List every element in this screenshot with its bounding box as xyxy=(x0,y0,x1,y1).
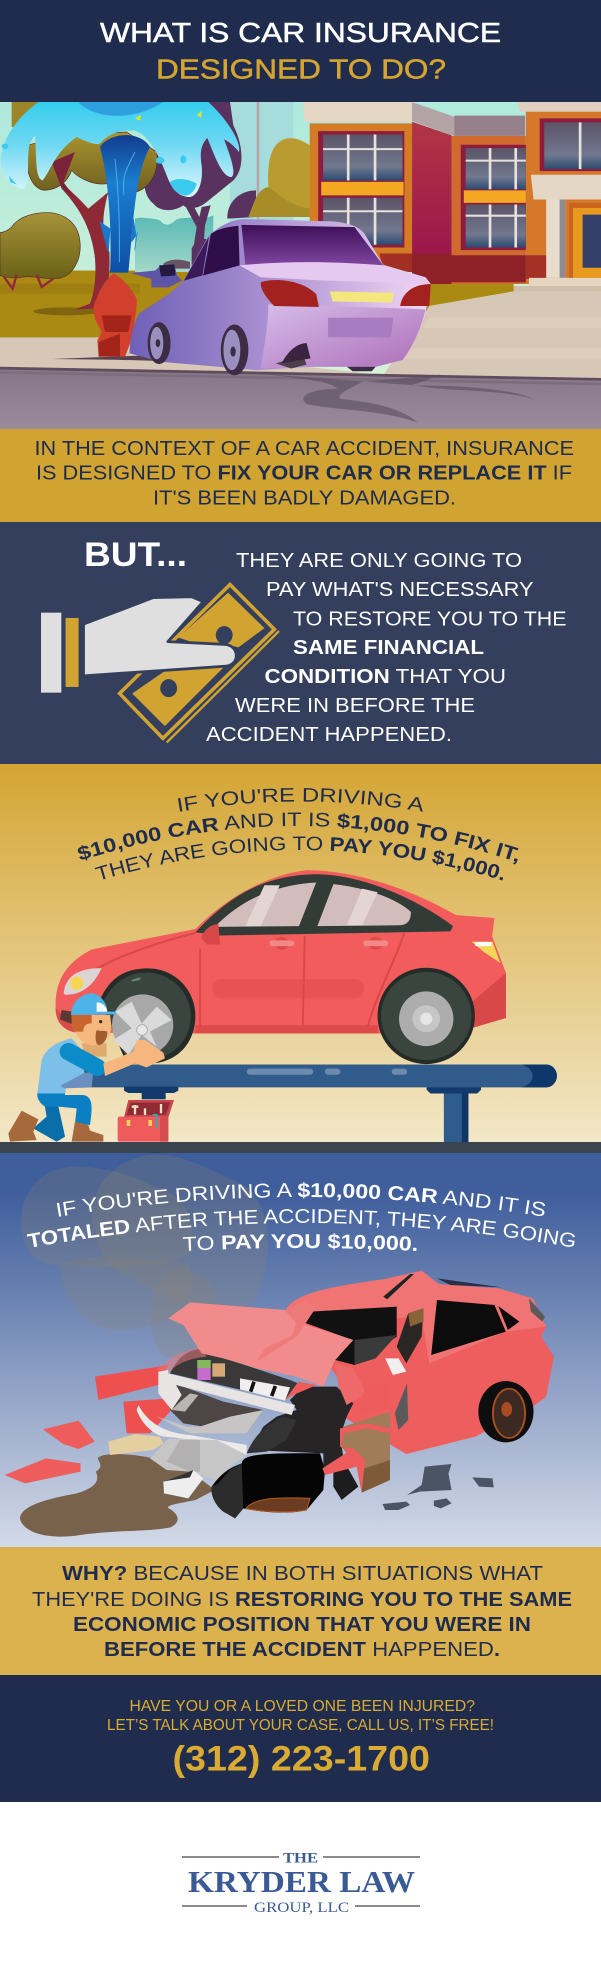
shadow under tree xyxy=(33,307,100,315)
red inner panels xyxy=(335,1363,367,1405)
floor strip xyxy=(0,1142,601,1153)
license plate xyxy=(328,318,393,337)
tree branch in front xyxy=(52,152,75,197)
panel: but explanation xyxy=(0,522,601,764)
logo: the kryder law group: GROUP, LLC xyxy=(254,1900,349,1916)
panel: title header xyxy=(0,0,601,102)
tail lights xyxy=(261,280,319,307)
white box xyxy=(163,1470,203,1498)
windows xyxy=(318,131,404,247)
logo: the kryder law group: KRYDER LAW xyxy=(188,1864,415,1899)
text: only going to pay what is necessary: SAME FINANCIAL xyxy=(293,637,484,659)
illustration: red car on lift with mechanic xyxy=(8,870,557,1142)
sidewalk xyxy=(0,291,601,379)
panel: context statement xyxy=(0,429,601,522)
skid marks xyxy=(261,374,533,423)
water splash xyxy=(1,102,239,197)
text: only going to pay what is necessary: ACCIDENT HAPPENED. xyxy=(206,724,452,746)
right olive bush xyxy=(268,138,310,209)
smoke cloud xyxy=(21,1155,268,1358)
text: repair scenario arched xyxy=(78,788,518,880)
olive canopy top xyxy=(12,102,38,127)
red car body xyxy=(56,870,506,1033)
text: only going to pay what is necessary: PAY WHAT'S NECESSARY xyxy=(266,579,534,601)
text: only going to pay what is necessary: TO RESTORE YOU TO THE xyxy=(293,608,566,630)
plum tree xyxy=(145,102,241,210)
left bush xyxy=(0,213,80,279)
teal hedge xyxy=(20,216,214,240)
windows xyxy=(431,1300,506,1355)
text: context line one: IN THE CONTEXT OF A CAR ACCIDENT, INSURANCE xyxy=(34,438,574,460)
brown panel xyxy=(342,1412,390,1493)
panel: call to action xyxy=(0,1675,601,1802)
text: only going to pay what is necessary: CONDITION THAT YOU xyxy=(264,666,506,688)
illustration: wrecked red car xyxy=(5,1155,554,1537)
windows xyxy=(195,874,453,936)
debris red xyxy=(43,1421,95,1449)
text: why line three: ECONOMIC POSITION THAT YOU WERE IN xyxy=(73,1614,531,1636)
car body xyxy=(130,219,431,370)
wheels xyxy=(282,343,310,363)
text: why line one: WHY? BECAUSE IN BOTH SITUATIONS WHAT xyxy=(62,1563,543,1585)
beige rock xyxy=(108,1434,163,1455)
text: have you been injured: HAVE YOU OR A LOVED ONE BEEN INJURED? xyxy=(130,1698,475,1715)
exhaust xyxy=(276,359,307,368)
text: totaled scenario arched: IF YOU'RE DRIVING A $10,000 CAR AND IT IS xyxy=(56,1182,546,1217)
icon: hand holding money xyxy=(41,584,279,742)
heading: what is car insurance: WHAT IS CAR INSURANCE xyxy=(100,17,501,48)
trees, water and hydrant xyxy=(0,102,310,315)
lift supports xyxy=(124,1087,178,1093)
lights xyxy=(64,968,102,995)
porch and door xyxy=(531,175,601,199)
dark shaft xyxy=(247,1417,297,1453)
lift bar xyxy=(65,1064,557,1087)
car cabin and rear xyxy=(286,1271,554,1454)
text: repair scenario arched: THEY ARE GOING TO PAY YOU $1,000. xyxy=(94,836,504,880)
logo: the kryder law group: THE xyxy=(283,1850,318,1866)
front wheel xyxy=(100,968,195,1064)
dark debris xyxy=(407,1464,452,1495)
wing mirror xyxy=(130,264,182,287)
engine dark xyxy=(250,1387,353,1470)
radiator teeth xyxy=(240,1378,290,1401)
olive canopy xyxy=(26,132,157,192)
heading: designed to do: DESIGNED TO DO? xyxy=(156,54,446,84)
mechanic xyxy=(8,993,165,1142)
text: call us free: LET’S TALK ABOUT YOUR CASE, CALL US, IT’S FREE! xyxy=(107,1717,494,1734)
text: only going to pay what is necessary: THEY ARE ONLY GOING TO xyxy=(236,550,522,572)
rear wheel xyxy=(378,968,475,1064)
text: totaled scenario arched xyxy=(26,1182,575,1252)
silver struts xyxy=(172,1393,198,1412)
lift legs xyxy=(444,1091,468,1142)
text: repair scenario arched: $10,000 CAR AND IT IS $1,000 TO FIX IT, xyxy=(78,812,518,864)
text: totaled scenario arched: TOTALED AFTER THE ACCIDENT, THEY ARE GOING xyxy=(26,1209,575,1248)
mirror xyxy=(201,924,220,944)
text: phone number: (312) 223-1700 xyxy=(172,1740,430,1778)
panel: totaled car scenario xyxy=(0,1153,601,1547)
tree trunk xyxy=(60,183,110,310)
logo: the kryder law group xyxy=(182,1850,420,1916)
toolbox xyxy=(118,1100,174,1142)
heading: but: BUT... xyxy=(84,536,187,574)
illustration: purple car crashed into fire hydrant xyxy=(0,102,601,430)
tyre xyxy=(211,1453,325,1518)
red bumper strips xyxy=(95,1365,168,1400)
road xyxy=(0,368,601,430)
door gap xyxy=(397,1308,424,1363)
text: only going to pay what is necessary: WERE IN BEFORE THE xyxy=(235,695,475,717)
lower dark pieces xyxy=(333,1460,358,1500)
fire hydrant xyxy=(94,274,137,357)
lawn xyxy=(0,270,514,338)
text: why line four: BEFORE THE ACCIDENT HAPPENED . xyxy=(104,1639,500,1661)
fluid bottles xyxy=(197,1361,211,1380)
rear wheel xyxy=(478,1381,534,1442)
text: context line two: IS DESIGNED TO FIX YOUR CAR OR REPLACE IT IF xyxy=(36,462,572,484)
hood xyxy=(168,1302,353,1387)
text: totaled scenario arched: TO PAY YOU $10,000. xyxy=(182,1233,416,1252)
oil puddle xyxy=(20,1454,215,1537)
white front bar xyxy=(158,1370,295,1415)
silver bumper xyxy=(137,1405,247,1455)
water jet xyxy=(100,135,150,273)
building walls xyxy=(310,123,412,270)
engine interior xyxy=(170,1382,263,1433)
text: context line three: IT'S BEEN BADLY DAMAGED. xyxy=(153,488,456,510)
panel: car repair scenario xyxy=(0,764,601,1153)
text: repair scenario arched: IF YOU'RE DRIVING A xyxy=(178,788,423,812)
door handles xyxy=(275,937,289,950)
text: only going to pay what is necessary xyxy=(206,550,566,746)
panel: why explanation xyxy=(0,1547,601,1675)
text: why line two: THEY'RE DOING IS RESTORING YOU TO THE SAME xyxy=(32,1589,572,1611)
